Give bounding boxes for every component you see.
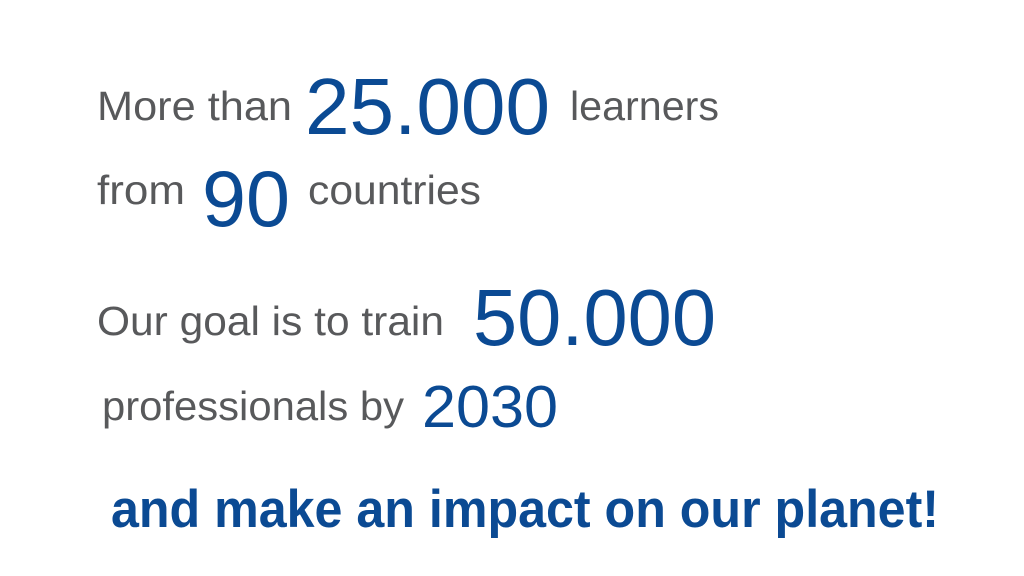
text block: target year: 2030 xyxy=(422,374,558,440)
text block: learners count: More than xyxy=(97,83,292,129)
text block: target year xyxy=(102,374,558,440)
text block: training goal: Our goal is to train xyxy=(97,298,444,344)
closing statement: and make an impact on our planet! xyxy=(111,480,939,539)
text block: target year: professionals by xyxy=(102,383,404,429)
text block: learners count xyxy=(97,62,719,151)
text block: countries: from xyxy=(97,167,185,213)
text block: learners count: 25.000 xyxy=(305,62,550,151)
text block: countries: 90 xyxy=(202,154,290,243)
text block: learners count: learners xyxy=(570,83,719,129)
text block: countries xyxy=(97,154,481,243)
text block: training goal: 50.000 xyxy=(473,273,716,362)
text block: countries: countries xyxy=(308,167,481,213)
text block: training goal xyxy=(97,273,716,362)
